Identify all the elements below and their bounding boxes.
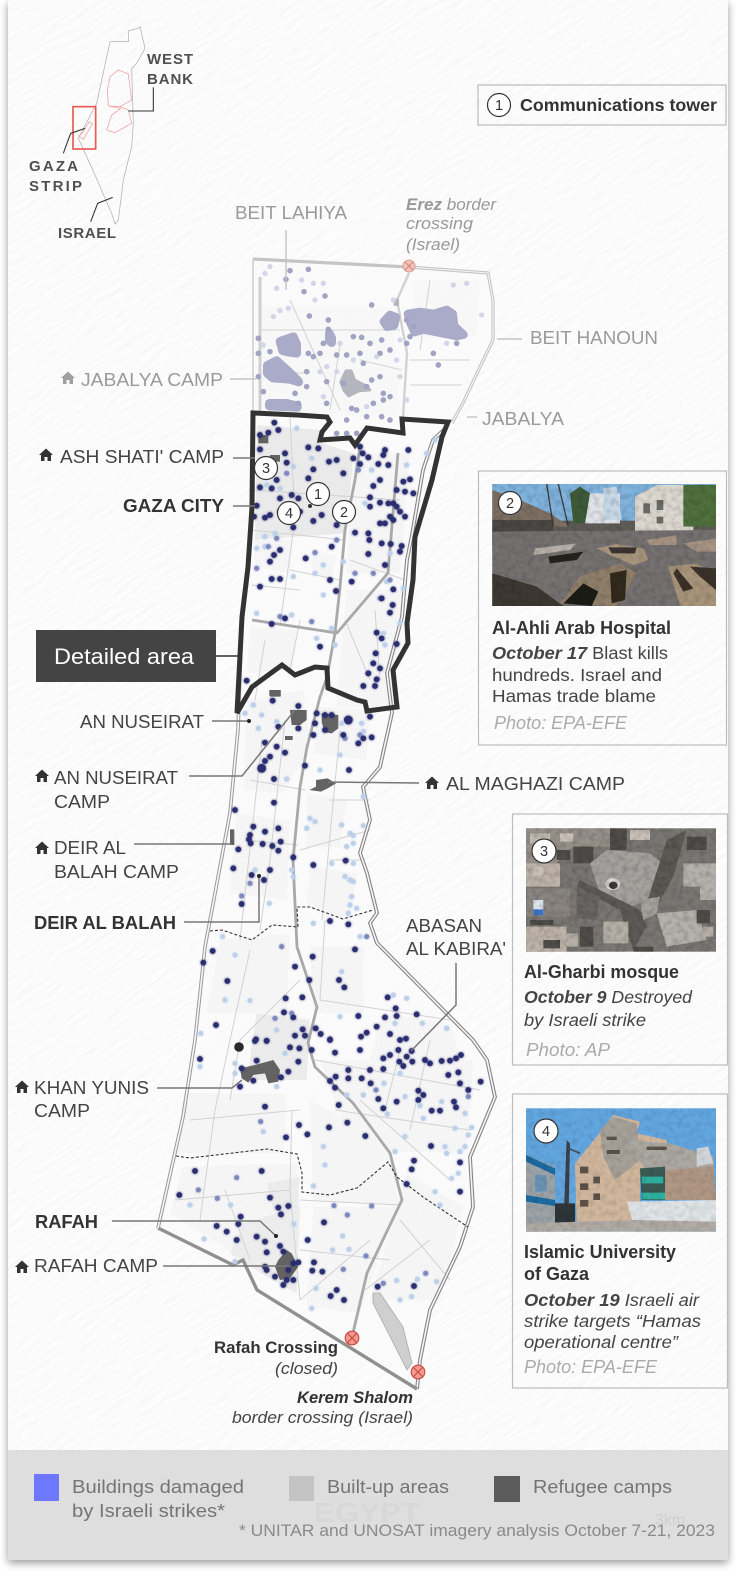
built-up areas: [170, 280, 480, 1313]
caption: hundreds. Israel and: [492, 665, 662, 685]
caption: strike targets “Hamas: [524, 1311, 701, 1331]
label: Beit Lahiya: BEIT LAHIYA: [235, 203, 347, 223]
photo: crater: [526, 828, 716, 952]
caption: October 19 Israeli air: [524, 1290, 700, 1310]
callout: detailed area: Detailed area: [54, 644, 195, 669]
border crossing markers: [345, 260, 425, 1379]
ghost labels under legend: 3km: [655, 1512, 685, 1529]
label: Rafah: RAFAH: [35, 1212, 98, 1232]
caption: October 17 Blast kills: [492, 643, 668, 663]
minor roads: [175, 280, 480, 1300]
photo: burnt cars: [492, 484, 716, 606]
map number markers: 1: [314, 487, 322, 503]
legend item: built-up areas: [289, 1476, 449, 1501]
map number markers: 4: [285, 506, 293, 522]
refugee camps: [230, 435, 338, 1280]
label: An Nuseirat camp: [35, 710, 295, 812]
label: Al Maghazi camp: [328, 774, 625, 794]
caption: by Israeli strike: [524, 1010, 646, 1030]
locator map: [29, 27, 193, 242]
north border: [258, 277, 262, 413]
label: Khan Yunis camp: KHAN YUNIS: [34, 1078, 149, 1098]
locator map: WEST: [147, 51, 193, 68]
badge 3: [532, 839, 556, 863]
legend item: damaged buildings: Buildings damaged: [72, 1476, 244, 1497]
legend item: damaged buildings: by Israeli strikes*: [72, 1500, 225, 1521]
label: An Nuseirat: [80, 712, 251, 732]
ghost labels under legend: [314, 1497, 685, 1529]
badge 2: [498, 492, 522, 514]
map number markers: [254, 456, 356, 524]
airport: [373, 1293, 412, 1370]
caption: Hamas trade blame: [492, 686, 656, 706]
title: of Gaza: [524, 1264, 590, 1284]
label: Jabalya camp: [61, 370, 256, 390]
label: Rafah Crossing: [214, 1338, 338, 1378]
panel: Islamic University of Gaza: Photo: EPA-EFE: [524, 1357, 658, 1377]
key: communications tower: [478, 85, 726, 125]
label: Erez crossing: [406, 196, 498, 254]
label: Rafah Crossing: Rafah Crossing: [214, 1338, 338, 1357]
label: Jabalya: JABALYA: [482, 409, 564, 429]
key: communications tower: 1: [495, 98, 503, 114]
legend: [8, 1450, 728, 1560]
label: Deir al Balah: [34, 874, 261, 933]
north damage (faded): [258, 267, 482, 433]
label: Rafah camp: RAFAH CAMP: [34, 1256, 158, 1276]
label: Rafah camp: [15, 1256, 290, 1276]
label: Rafah: [35, 1212, 278, 1238]
panel: Al-Ahli Arab Hospital: [478, 471, 726, 745]
label: Abasan al Kabira: AL KABIRA': [406, 939, 506, 959]
legend item: refugee camps: Refugee camps: [533, 1476, 672, 1497]
map number markers: 2: [340, 505, 348, 521]
caption: operational centre”: [524, 1332, 679, 1352]
label: Khan Yunis camp: CAMP: [34, 1101, 90, 1121]
label: Jabalya camp: JABALYA CAMP: [81, 370, 223, 390]
label: Deir al Balah: DEIR AL BALAH: [34, 913, 176, 933]
map number markers: 3: [262, 461, 270, 477]
label: Kerem Shalom: [232, 1388, 413, 1427]
place labels: [15, 196, 658, 1427]
panel: Al-Gharbi mosque: Al-Gharbi mosque: [524, 962, 679, 982]
large marker dot: [234, 1042, 244, 1052]
caption: [524, 1290, 701, 1352]
panel: Al-Ahli Arab Hospital: Photo: EPA-EFE: [494, 713, 628, 733]
label: Deir al Balah camp: [35, 838, 232, 882]
label: Al Maghazi camp: AL MAGHAZI CAMP: [446, 774, 625, 794]
title: [524, 1242, 676, 1284]
detailed area outline: [237, 413, 448, 713]
key: communications tower: Communications tower: [520, 95, 717, 115]
label: Erez crossing: (Israel): [406, 236, 460, 254]
badge 4: [534, 1119, 558, 1143]
label: Deir al Balah camp: BALAH CAMP: [54, 862, 179, 882]
legend item: built-up areas: Built-up areas: [327, 1476, 449, 1497]
border lines: [360, 427, 495, 1389]
locator map: GAZA: [29, 158, 78, 175]
caption: [524, 987, 693, 1030]
photo: damaged university: [526, 1108, 716, 1232]
title: Islamic University: [524, 1242, 676, 1262]
legend item: damaged buildings: [34, 1474, 244, 1521]
panel: Islamic University of Gaza: [512, 1094, 728, 1388]
ghost labels under legend: EGYPT: [314, 1497, 420, 1528]
label: Beit Hanoun: BEIT HANOUN: [530, 328, 658, 348]
label: Kerem Shalom: border crossing (Israel): [232, 1408, 413, 1427]
label: Ash Shati camp: ASH SHATI' CAMP: [60, 447, 224, 467]
label: An Nuseirat: AN NUSEIRAT: [80, 712, 204, 732]
main roads: [252, 447, 402, 1333]
callout: detailed area: [36, 630, 240, 682]
label: An Nuseirat camp: CAMP: [54, 792, 110, 812]
label: Erez crossing: crossing: [406, 215, 474, 233]
panel: Al-Gharbi mosque: [512, 814, 728, 1065]
label: Erez crossing: Erez border: [406, 196, 498, 214]
district boundaries: [176, 907, 468, 1227]
legend item: refugee camps: [494, 1476, 672, 1502]
label: Deir al Balah camp: DEIR AL: [54, 838, 126, 858]
label: Khan Yunis camp: [15, 1078, 242, 1121]
badge 4: 4: [542, 1124, 550, 1140]
panel: Al-Gharbi mosque: Photo: AP: [526, 1040, 610, 1060]
label: Rafah Crossing: (closed): [275, 1359, 338, 1378]
locator map: STRIP: [29, 178, 82, 195]
building damage dots: [179, 423, 481, 1308]
caption: October 9 Destroyed: [524, 987, 693, 1007]
locator map: ISRAEL: [58, 225, 116, 242]
locator map: BANK: [147, 71, 193, 88]
label: Kerem Shalom: Kerem Shalom: [297, 1388, 413, 1407]
label: Gaza City: GAZA CITY: [123, 496, 224, 516]
label: Abasan al Kabira: ABASAN: [406, 916, 482, 936]
label: An Nuseirat camp: AN NUSEIRAT: [54, 768, 178, 788]
label: Abasan al Kabira: [406, 916, 506, 1051]
badge 3: 3: [540, 844, 548, 860]
label: Beit Lahiya: [235, 203, 347, 290]
land area: [158, 259, 495, 1389]
map of Gaza Strip: [158, 259, 495, 1389]
source note: * UNITAR and UNOSAT imagery analysis October 7-21, 2023: [239, 1521, 715, 1540]
badge 2: 2: [506, 496, 514, 512]
panel: Al-Ahli Arab Hospital: Al-Ahli Arab Hospital: [492, 618, 671, 638]
caption: [492, 643, 668, 706]
